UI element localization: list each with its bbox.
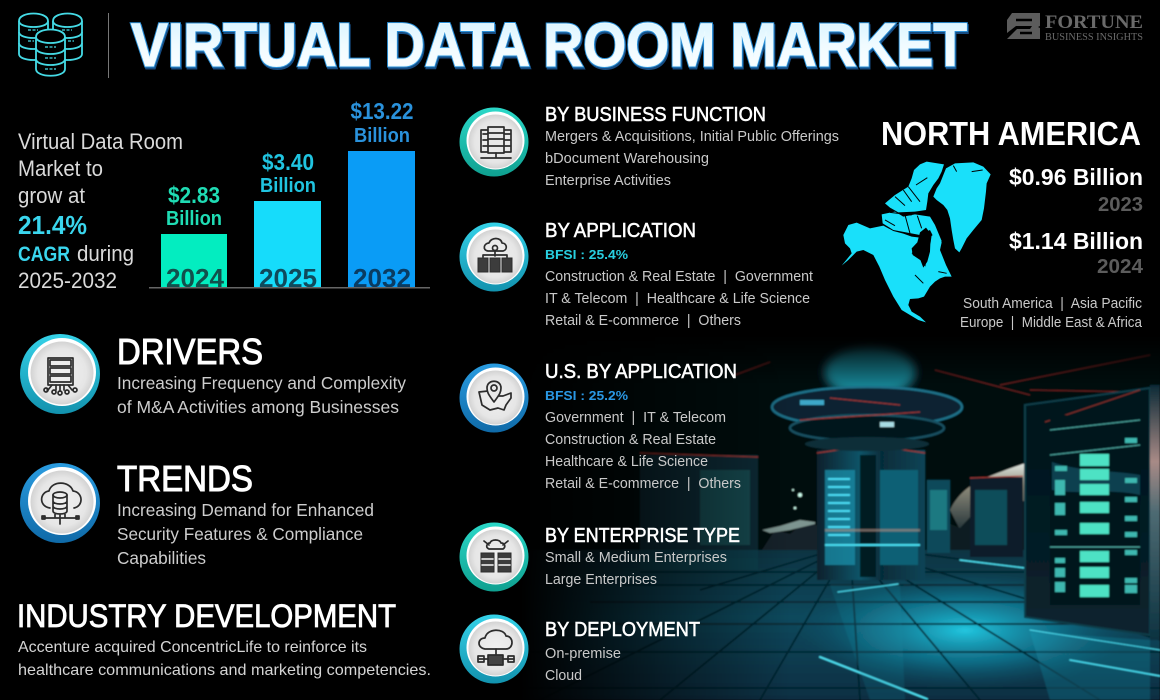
icon: server network xyxy=(20,334,100,414)
bar 2024: Billion xyxy=(166,207,222,230)
bar 2025 xyxy=(254,149,321,293)
list: Mergers & Acquisitions, Initial Public Offerings xyxy=(545,129,839,145)
list: Construction & Real Estate xyxy=(545,432,716,448)
panel: industry development xyxy=(17,598,431,679)
stat 2023: 2023 xyxy=(1098,194,1143,216)
list: Construction & Real Estate | Government xyxy=(545,269,813,285)
CAGR text block: CAGR xyxy=(18,243,70,266)
list: bDocument Warehousing xyxy=(545,151,709,167)
text: trends: Security Features & Compliance xyxy=(117,524,363,544)
bar 2025: $3.40 xyxy=(262,149,314,175)
list xyxy=(545,550,727,588)
panel: U.S. by application xyxy=(460,361,741,492)
stat 2024 xyxy=(1009,228,1144,278)
logo: Fortune Business Insights xyxy=(1007,12,1143,43)
text: industry development xyxy=(18,639,431,679)
panel: by enterprise type xyxy=(460,522,740,592)
list: Government | IT & Telecom xyxy=(545,410,726,426)
list: IT & Telecom | Healthcare & Life Science xyxy=(545,291,810,307)
text: trends: Increasing Demand for Enhanced xyxy=(117,500,374,520)
stat 2024: $1.14 Billion xyxy=(1009,228,1143,254)
panel: trends xyxy=(20,458,374,568)
list xyxy=(545,646,621,684)
other regions: South America | Asia Pacific xyxy=(963,296,1142,312)
list xyxy=(545,269,813,329)
list xyxy=(545,129,839,189)
text: trends xyxy=(117,500,374,568)
left glass rack xyxy=(638,451,760,551)
ceiling disc xyxy=(772,346,962,451)
list: Healthcare & Life Science xyxy=(545,454,708,470)
text: drivers: of M&A Activities among Businesses xyxy=(117,397,399,417)
list: Large Enterprises xyxy=(545,572,657,588)
panel: drivers xyxy=(20,331,406,417)
CAGR text block: during xyxy=(77,241,134,266)
other regions: Europe | Middle East & Africa xyxy=(960,315,1143,331)
heading: U.S. BY APPLICATION xyxy=(545,361,737,383)
list xyxy=(545,410,741,492)
bar 2025: 2025 xyxy=(259,263,317,293)
background photo: futuristic data center xyxy=(544,344,1160,700)
title: VIRTUAL DATA ROOM MARKET xyxy=(131,11,967,79)
list: Retail & E-commerce | Others xyxy=(545,313,741,329)
central rack xyxy=(817,445,925,580)
bar 2024 xyxy=(161,182,227,293)
ceiling lines xyxy=(735,355,1150,395)
share value: BFSI : 25.2% xyxy=(545,388,628,403)
icon: U.S. map pin xyxy=(460,364,528,432)
list: Enterprise Activities xyxy=(545,173,671,189)
bar 2025: Billion xyxy=(260,174,316,197)
icon: cloud database xyxy=(20,463,100,543)
bar 2024: $2.83 xyxy=(168,182,220,208)
CAGR text block: Market to xyxy=(18,156,103,181)
CAGR text block: grow at xyxy=(18,183,85,208)
CAGR text block: Virtual Data Room xyxy=(18,129,183,154)
text: drivers: Increasing Frequency and Complexity xyxy=(117,373,406,393)
text: trends: Capabilities xyxy=(117,548,206,568)
logo: Fortune Business Insights: FORTUNE xyxy=(1045,12,1143,33)
bar 2032: $13.22 xyxy=(350,98,414,124)
bar 2024: 2024 xyxy=(166,263,225,293)
panel: by application xyxy=(460,220,813,329)
CAGR text block xyxy=(18,129,183,293)
list: Small & Medium Enterprises xyxy=(545,550,727,566)
text: drivers xyxy=(117,373,406,417)
CAGR text block: 21.4% xyxy=(18,210,87,240)
heading: BY BUSINESS FUNCTION xyxy=(545,104,766,126)
heading: north america: NORTH AMERICA xyxy=(881,115,1141,152)
heading: BY DEPLOYMENT xyxy=(545,619,700,641)
title: VIRTUAL DATA ROOM MARKET xyxy=(131,11,967,79)
list: Retail & E-commerce | Others xyxy=(545,476,741,492)
panel: north america xyxy=(842,115,1144,331)
stat 2023: $0.96 Billion xyxy=(1009,164,1143,190)
list: On-premise xyxy=(545,646,621,662)
floor xyxy=(544,549,1160,700)
CAGR text block: 2025-2032 xyxy=(18,268,117,293)
right server rack xyxy=(1025,385,1160,640)
map: North America xyxy=(842,162,991,322)
bar 2032: Billion xyxy=(354,124,410,147)
server plates xyxy=(1080,454,1109,597)
stat 2023 xyxy=(1009,164,1143,216)
bar 2032: 2032 xyxy=(353,263,411,293)
background racks xyxy=(927,476,1023,557)
sky and horizon xyxy=(637,354,1160,550)
text: industry development: Accenture acquired ConcentricLife to reinforce its xyxy=(18,639,367,656)
panel: by business function xyxy=(460,104,839,189)
header icon: database cylinders xyxy=(19,14,82,76)
heading: BY ENTERPRISE TYPE xyxy=(545,525,740,547)
text: industry development: healthcare communications and marketing competencies. xyxy=(18,662,431,679)
panel: by deployment xyxy=(460,614,700,684)
bar 2032 xyxy=(348,98,415,293)
heading: BY APPLICATION xyxy=(545,220,696,242)
logo: Fortune Business Insights: BUSINESS INSIGHTS xyxy=(1045,32,1143,43)
heading: drivers: DRIVERS xyxy=(117,331,263,372)
other regions xyxy=(960,296,1143,331)
bar chart xyxy=(149,98,430,293)
heading: industry development: INDUSTRY DEVELOPMENT xyxy=(17,598,396,634)
list: Cloud xyxy=(545,668,582,684)
icon: server stack xyxy=(460,108,528,176)
heading: trends: TRENDS xyxy=(117,458,253,499)
header divider xyxy=(108,13,109,78)
share value: BFSI : 25.4% xyxy=(545,247,628,262)
icon: cloud hosting xyxy=(460,614,528,684)
icon: twin servers xyxy=(460,522,528,592)
stat 2024: 2024 xyxy=(1097,256,1144,278)
icon: cloud servers xyxy=(460,222,528,292)
